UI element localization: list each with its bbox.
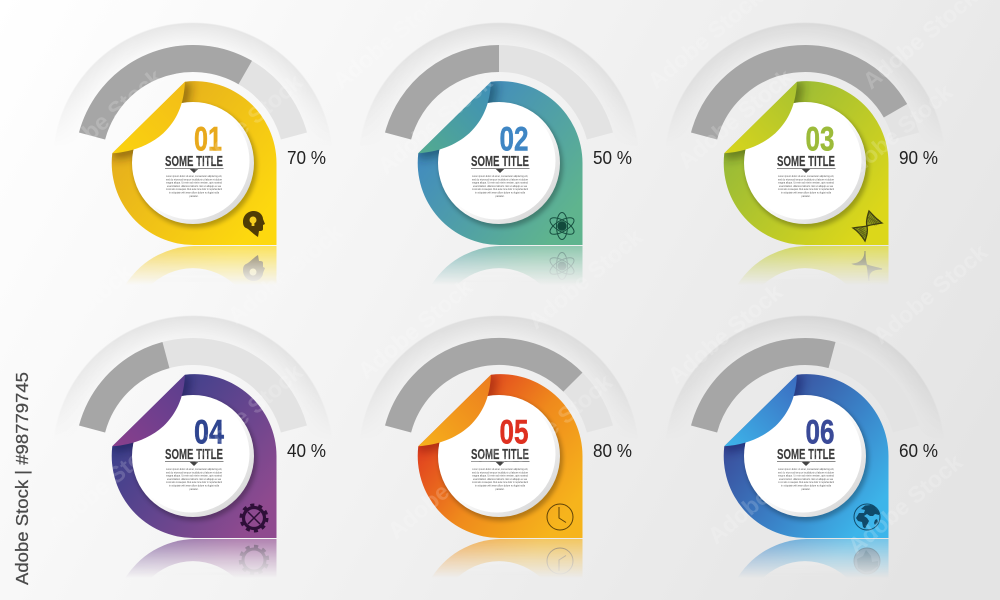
body text: sed do eiusmod tempor incididunt ut labore et dolore	[166, 470, 222, 474]
reflection	[128, 246, 276, 282]
title: SOME TITLE	[471, 446, 529, 463]
stock watermarks: Adobe Stock	[663, 279, 787, 389]
teardrop	[112, 374, 277, 538]
body text	[166, 467, 222, 491]
number: 05	[500, 414, 528, 452]
body text	[472, 467, 528, 491]
body text: pariatur.	[190, 487, 199, 491]
title rule	[777, 169, 836, 172]
icon: dna	[853, 211, 882, 241]
stock watermarks: Adobe Stock	[843, 449, 967, 559]
ground shadow	[765, 538, 925, 540]
body text: Lorem ipsum dolor sit amet, consectetur adipiscing elit,	[778, 174, 834, 178]
title rule	[165, 169, 224, 172]
ground shadow	[153, 246, 313, 248]
body text: commodo consequat. Duis aute irure dolor in reprehenderit	[472, 187, 528, 191]
body text: exercitation ullamco laboris nisi ut aliquip ex ea	[473, 184, 527, 188]
percent label: 50 %	[593, 148, 632, 168]
stock id side label: Adobe Stock | #98779745	[12, 372, 32, 585]
gauge value 80%	[398, 352, 573, 429]
percent label: 90 %	[899, 148, 938, 168]
halo ring	[63, 316, 323, 406]
number: 01	[194, 121, 222, 159]
gauge value 50%	[398, 58, 499, 136]
title rule	[471, 169, 530, 172]
body text: pariatur.	[496, 487, 505, 491]
body text: exercitation ullamco laboris nisi ut aliquip ex ea	[779, 184, 833, 188]
ground shadow	[459, 246, 619, 248]
reflection	[128, 539, 276, 576]
body text: magna aliqua. Ut enim ad minim veniam, quis nostrud	[472, 181, 528, 185]
stock watermarks: Adobe Stock	[43, 429, 167, 539]
teardrop	[724, 81, 888, 245]
body text: in voluptate velit esse cillum dolore eu fugiat nulla	[475, 190, 525, 194]
body text: pariatur.	[802, 194, 811, 198]
icon: clock	[547, 504, 573, 530]
title rule	[165, 462, 224, 466]
white disc	[438, 102, 563, 228]
title rule	[471, 462, 530, 466]
curled corner	[418, 82, 491, 153]
stock watermarks: Adobe Stock	[493, 369, 617, 479]
body text: sed do eiusmod tempor incididunt ut labore et dolore	[166, 177, 222, 181]
gauge track	[704, 351, 906, 429]
white disc	[132, 102, 257, 228]
body text: Lorem ipsum dolor sit amet, consectetur adipiscing elit,	[166, 467, 222, 471]
body text	[472, 174, 528, 198]
reflection	[740, 246, 888, 282]
body text: sed do eiusmod tempor incididunt ut labore et dolore	[778, 177, 834, 181]
fold shadow	[112, 375, 185, 446]
icon: globe	[854, 504, 880, 530]
number: 03	[806, 121, 834, 159]
white disc	[744, 102, 869, 228]
icon: gear	[241, 505, 267, 531]
percent label: 40 %	[287, 441, 326, 461]
title: SOME TITLE	[471, 153, 529, 170]
gauge track	[398, 351, 600, 429]
reflection	[740, 539, 888, 575]
stock watermarks: Adobe Stock	[868, 239, 992, 349]
body text: in voluptate velit esse cillum dolore eu fugiat nulla	[781, 190, 831, 194]
percent label: 60 %	[899, 441, 938, 461]
body text: Lorem ipsum dolor sit amet, consectetur adipiscing elit,	[472, 174, 528, 178]
icon: head with bulb	[243, 211, 265, 237]
fold shadow	[724, 82, 797, 153]
title rule	[777, 462, 836, 466]
fold shadow	[418, 375, 491, 446]
stock watermarks: Adobe Stock	[373, 69, 497, 179]
fold shadow	[724, 375, 797, 446]
gauge value 60%	[704, 351, 832, 429]
halo ring	[369, 22, 629, 113]
gauge track	[92, 351, 294, 429]
gauge track	[704, 58, 906, 136]
stock watermarks: Adobe Stock	[43, 64, 167, 174]
white disc	[744, 395, 869, 521]
curled corner	[112, 375, 185, 446]
stock watermarks: Adobe Stock	[703, 439, 827, 549]
title: SOME TITLE	[777, 446, 835, 463]
panel: 02	[369, 22, 632, 282]
gauge track	[92, 58, 294, 136]
curled corner	[724, 82, 797, 153]
stock watermarks: Adobe Stock	[523, 224, 647, 334]
percent label: 80 %	[593, 441, 632, 461]
gauge value 70%	[92, 58, 245, 136]
body text	[778, 174, 834, 198]
body text: pariatur.	[190, 194, 199, 198]
body text: magna aliqua. Ut enim ad minim veniam, quis nostrud	[166, 474, 222, 478]
body text	[166, 174, 222, 198]
icon: atom	[548, 212, 576, 240]
body text: sed do eiusmod tempor incididunt ut labore et dolore	[472, 470, 528, 474]
body text: pariatur.	[802, 487, 811, 491]
teardrop	[724, 374, 888, 538]
body text: Lorem ipsum dolor sit amet, consectetur adipiscing elit,	[778, 467, 834, 471]
panel: 06	[675, 316, 938, 575]
title: SOME TITLE	[777, 153, 835, 170]
gauge track	[398, 58, 600, 136]
teardrop	[418, 374, 582, 538]
halo ring	[369, 316, 629, 406]
body text: sed do eiusmod tempor incididunt ut labore et dolore	[778, 470, 834, 474]
halo ring	[675, 22, 935, 113]
title: SOME TITLE	[165, 153, 223, 170]
ground shadow	[153, 538, 313, 540]
body text: in voluptate velit esse cillum dolore eu fugiat nulla	[475, 484, 525, 488]
reflection	[434, 539, 582, 576]
body text: exercitation ullamco laboris nisi ut aliquip ex ea	[167, 477, 221, 481]
body text: commodo consequat. Duis aute irure dolor in reprehenderit	[166, 480, 222, 484]
stock watermarks: Adobe Stock	[383, 434, 507, 544]
curled corner	[724, 375, 797, 446]
body text: in voluptate velit esse cillum dolore eu fugiat nulla	[169, 484, 219, 488]
title: SOME TITLE	[165, 446, 223, 463]
fold shadow	[112, 82, 185, 153]
white disc	[438, 395, 563, 521]
fold shadow	[418, 82, 491, 153]
stock watermarks: Adobe Stock	[183, 359, 307, 469]
body text: magna aliqua. Ut enim ad minim veniam, quis nostrud	[778, 474, 834, 478]
stock watermarks: Adobe Stock	[833, 79, 957, 189]
ground shadow	[765, 246, 925, 248]
number: 06	[806, 414, 834, 452]
panel: 01	[63, 22, 326, 282]
white disc	[132, 395, 257, 521]
body text: magna aliqua. Ut enim ad minim veniam, quis nostrud	[778, 181, 834, 185]
body text: exercitation ullamco laboris nisi ut aliquip ex ea	[473, 477, 527, 481]
halo ring	[675, 316, 935, 406]
panel: 03	[675, 22, 938, 282]
curled corner	[418, 375, 491, 446]
body text: commodo consequat. Duis aute irure dolor in reprehenderit	[166, 187, 222, 191]
teardrop	[418, 81, 582, 245]
stock watermarks: Adobe Stock	[183, 69, 307, 179]
ground shadow	[459, 538, 619, 540]
body text: commodo consequat. Duis aute irure dolor in reprehenderit	[472, 480, 528, 484]
teardrop	[112, 81, 277, 245]
stock watermarks: Adobe Stock	[13, 259, 137, 369]
body text: in voluptate velit esse cillum dolore eu fugiat nulla	[781, 484, 831, 488]
stock watermarks: Adobe Stock	[673, 64, 797, 174]
panel: 05	[369, 316, 632, 576]
panel: 04	[63, 316, 326, 576]
number: 04	[194, 414, 224, 452]
body text: exercitation ullamco laboris nisi ut aliquip ex ea	[779, 477, 833, 481]
stock watermarks: Adobe Stock	[353, 274, 477, 384]
body text: pariatur.	[496, 194, 505, 198]
body text: magna aliqua. Ut enim ad minim veniam, quis nostrud	[472, 474, 528, 478]
number: 02	[500, 121, 528, 159]
percent label: 70 %	[287, 148, 326, 168]
body text: commodo consequat. Duis aute irure dolor in reprehenderit	[778, 187, 834, 191]
gauge value 40%	[92, 355, 166, 429]
gauge value 90%	[704, 58, 896, 136]
body text: in voluptate velit esse cillum dolore eu fugiat nulla	[169, 190, 219, 194]
reflection	[434, 246, 582, 282]
curled corner	[112, 82, 185, 153]
body text: exercitation ullamco laboris nisi ut aliquip ex ea	[167, 184, 221, 188]
body text: Lorem ipsum dolor sit amet, consectetur adipiscing elit,	[472, 467, 528, 471]
body text: magna aliqua. Ut enim ad minim veniam, quis nostrud	[166, 181, 222, 185]
body text: sed do eiusmod tempor incididunt ut labore et dolore	[472, 177, 528, 181]
body text: Lorem ipsum dolor sit amet, consectetur adipiscing elit,	[166, 174, 222, 178]
stock watermarks: Adobe Stock	[223, 219, 347, 329]
body text	[778, 467, 834, 491]
body text: commodo consequat. Duis aute irure dolor in reprehenderit	[778, 480, 834, 484]
halo ring	[63, 22, 323, 113]
